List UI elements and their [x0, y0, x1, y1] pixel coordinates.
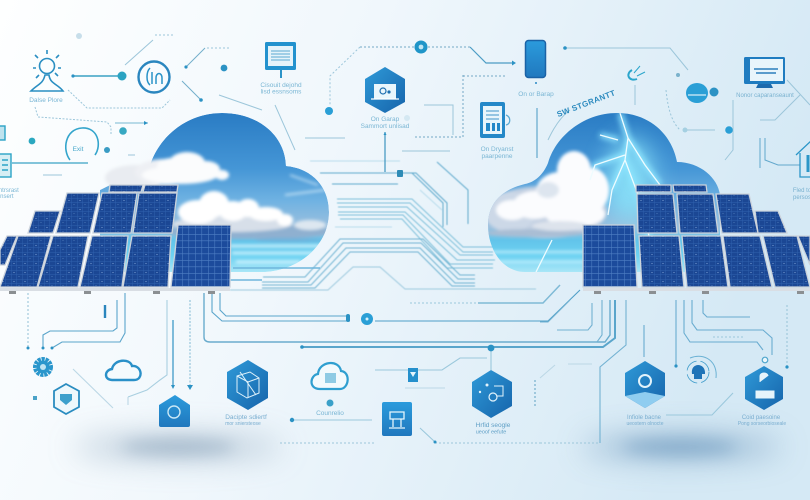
circuit node dots — [26, 314, 789, 444]
curved label: SW STGRANTT — [556, 88, 617, 119]
icon: exit ring — [66, 128, 110, 160]
label: laptop hexagon: Sammort unlisad — [361, 123, 410, 130]
label: target hexagon — [627, 415, 664, 427]
icon: outlined hexagon — [33, 384, 79, 414]
label: cube hexagon: Dacipte sdiertf — [225, 414, 267, 421]
right frame rail — [583, 288, 810, 291]
icon: target hexagon — [625, 361, 665, 408]
ground shadow left — [73, 434, 283, 460]
lightning glow — [590, 113, 660, 240]
icon: gear — [35, 359, 51, 375]
solar array right — [583, 185, 810, 291]
label: tablet: paarpenne — [481, 153, 513, 160]
label: key hexagon — [476, 422, 511, 436]
icon: key hexagon — [472, 370, 512, 418]
icon: kiosk tile — [382, 402, 412, 436]
label: monitor: Nonor caparanseaunt — [736, 93, 794, 99]
lightning bolt — [536, 113, 660, 272]
icon: robot — [676, 73, 718, 103]
icon: monitor — [744, 57, 785, 88]
icon: ring badge — [138, 62, 170, 92]
icon: outline cloud — [106, 361, 141, 380]
label: screen: Cisouit dejohd — [260, 82, 302, 89]
white cloud overflow — [105, 152, 229, 191]
icon: plug — [628, 66, 645, 80]
icon: sun and landscape — [31, 50, 63, 91]
icon: top node — [414, 40, 428, 54]
label: left edge — [0, 188, 19, 200]
circuit lines: lower connections — [28, 285, 787, 443]
label: screen — [260, 82, 302, 96]
top connector lines — [12, 35, 810, 175]
icon: document cloud — [312, 363, 348, 406]
label: laptop hexagon — [361, 116, 410, 130]
icon: exit ring: Exit — [73, 146, 84, 153]
label: target hexagon: Infiole bacne — [627, 415, 662, 421]
label: sun: Dalse Plore — [29, 97, 63, 104]
icon: house — [796, 140, 810, 177]
left frame rail — [0, 288, 230, 291]
right sky cloud window — [480, 110, 725, 275]
ground shadow right — [582, 434, 782, 460]
label: house — [793, 188, 810, 201]
white clouds right — [483, 151, 609, 262]
label: target hexagon: ueoxtern olnocte — [627, 421, 664, 427]
icon: laptop hexagon — [365, 67, 405, 113]
icon: left edge devices — [0, 126, 11, 177]
label: laptop hexagon: On Garap — [371, 116, 400, 123]
label: phone: On or Barap — [518, 91, 554, 98]
solar array left — [0, 185, 231, 291]
left sky cloud window — [100, 113, 335, 280]
circuit lines: centre bundles — [230, 161, 536, 290]
label: key hexagon: Hrfid seogle — [476, 422, 511, 429]
icon: screen — [265, 42, 296, 78]
label: key hexagon: ueoof eefute — [476, 430, 506, 436]
label: document cloud: Counrelio — [316, 410, 344, 417]
label: tablet: On Dryanst — [481, 146, 514, 153]
icon: phone — [526, 40, 546, 84]
icon: small tile — [408, 368, 418, 382]
label: cube hexagon: mor sniersteose — [225, 421, 261, 427]
icon: helmet ring — [687, 356, 716, 383]
centre square node — [397, 170, 403, 177]
label: tablet — [481, 146, 514, 160]
white clouds left — [165, 175, 335, 262]
icon: lock hexagon — [745, 357, 783, 410]
lower centre node — [361, 313, 373, 325]
label: lock hexagon: Pong sorseorbioseale — [738, 421, 786, 427]
label: lock hexagon: Coid paesoine — [742, 415, 781, 421]
icon: cube hexagon — [227, 360, 268, 410]
label: cube hexagon — [225, 414, 267, 427]
label: lock hexagon — [738, 415, 786, 427]
label: screen: lisd essnsoms — [261, 88, 302, 96]
icon: pentagon tile — [159, 395, 190, 427]
connector dots — [29, 33, 733, 144]
icon: tablet — [480, 102, 510, 138]
left panel feet — [9, 291, 215, 294]
right panel feet — [594, 291, 804, 294]
